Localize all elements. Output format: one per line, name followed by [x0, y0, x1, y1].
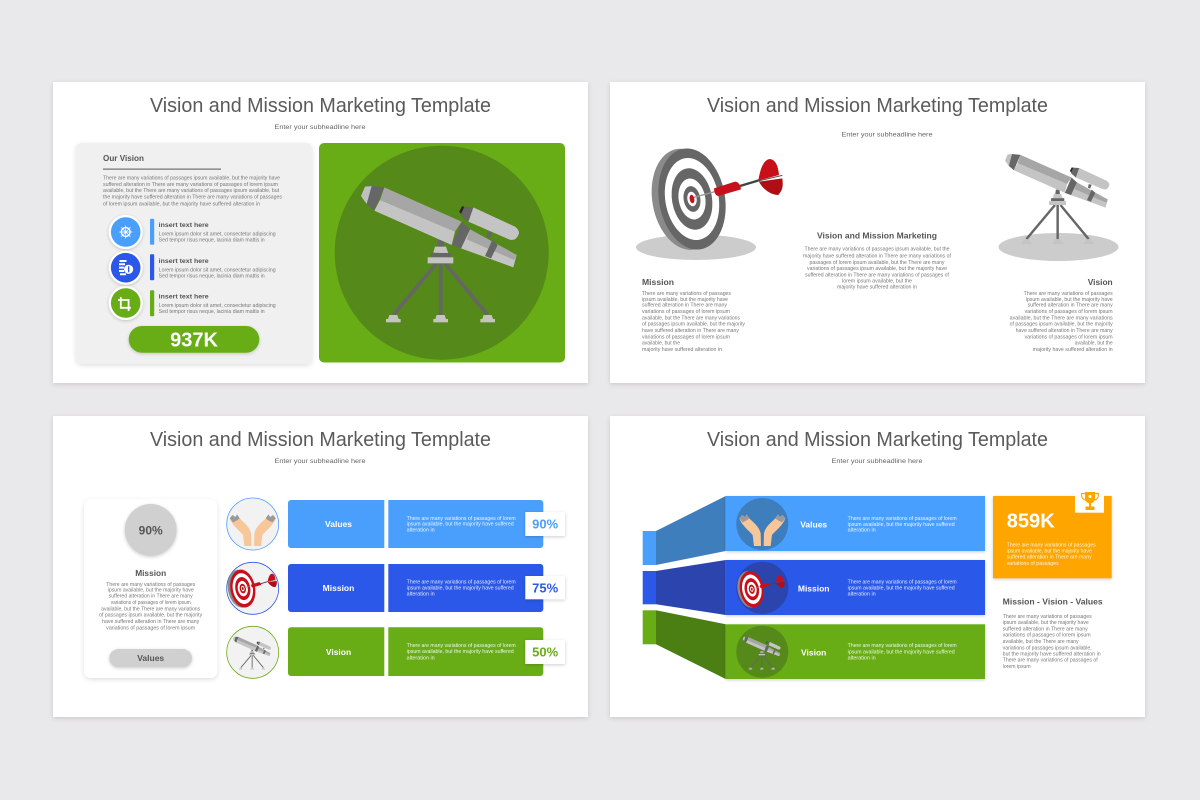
title: Vision and Mission Marketing Template [150, 429, 491, 451]
vision paragraph: There are many variations of passages ipsum available, but the majority have [103, 176, 280, 182]
title: Vision and Mission Marketing Template [150, 95, 491, 117]
center text block: majority have suffered alteration in There are many variations of [803, 254, 952, 260]
ribbon: vision: Vision [801, 648, 826, 658]
center text block: suffered alteration in There are many variations of passages of [805, 273, 950, 279]
mission vision values text [1003, 596, 1103, 670]
ribbon: mission: alteration in [848, 592, 876, 598]
ribbon: vision [643, 610, 985, 679]
row: mission: There are many variations of passages of lorem [407, 579, 516, 585]
mission text: have suffered alteration in There are many [102, 619, 200, 625]
list item 3 [150, 290, 276, 316]
stat card: 859K: variations of passages [1007, 561, 1059, 567]
row: vision: 50% [532, 645, 559, 660]
center text block: variations of passages ipsum available, but the majority have [807, 266, 947, 272]
icon: coins [109, 251, 143, 285]
row: mission: alteration in [407, 592, 435, 598]
mission text block: variations of passages of lorem ipsum [642, 309, 730, 315]
row: mission: Mission [323, 583, 354, 593]
list item 2 [150, 254, 276, 280]
icon: dartboard on shadow [636, 143, 783, 260]
icon: trophy [1075, 490, 1104, 513]
icon: crop [109, 286, 143, 320]
subtitle: Enter your subheadline here [842, 132, 933, 138]
vision paragraph [103, 176, 283, 207]
mission text block: suffered alteration in There are many [642, 303, 728, 309]
center text block: lorem ipsum available, but the [842, 278, 912, 284]
ribbon: values [643, 496, 985, 565]
vision text block: suffered alteration in There are many [1028, 303, 1113, 309]
vision text block: variations of passages of lorem ipsum [1025, 309, 1113, 315]
vision paragraph: available, but the There are many variations of passages ipsum available, but [103, 188, 280, 194]
ribbon: values: ipsum available, but the majority have suffered [848, 522, 955, 528]
mission text: available, but the There are many variations [101, 606, 201, 612]
vision text block: available, but the There are many variations [1010, 315, 1113, 321]
ribbon: mission: ipsum available, but the majority have suffered [848, 585, 955, 591]
panel: slide 3 percentages [53, 416, 588, 717]
mission card [84, 499, 217, 678]
vision text block: variations of passages of lorem ipsum [1025, 334, 1113, 340]
mission text: variations of passages of lorem ipsum [106, 625, 195, 631]
heading: our vision: Our Vision [103, 153, 144, 163]
vision text block: ipsum available, but the majority have [1026, 297, 1113, 303]
row: vision: There are many variations of passages of lorem [407, 643, 516, 649]
mission text [99, 568, 203, 631]
mission vision values text: suffered alteration in There are many [1003, 626, 1088, 632]
panel: slide 4 funnel ribbons [610, 416, 1145, 717]
center text block: Vision and Mission Marketing [817, 230, 937, 240]
vision text block: Vision [1088, 277, 1113, 287]
row: values: alteration in [407, 528, 435, 534]
vision text block [1010, 277, 1113, 353]
vision paragraph: the majority have suffered alteration in There are many variations of passages [103, 194, 283, 200]
percent circle: 90% [139, 524, 163, 538]
list item 2: Lorem ipsum dolor sit amet, consectetur adipiscing [159, 267, 276, 273]
values pill [109, 649, 192, 667]
row: values: 90% [532, 517, 559, 532]
mission text block: have suffered alteration in There are many [642, 328, 740, 334]
vision paragraph: suffered alteration in There are many variations of passages of lorem ipsum [103, 182, 278, 188]
list item 1: Sed tempor risus neque, lacinia diam mattis in [159, 238, 265, 244]
ribbon: values: alteration in [848, 528, 876, 534]
icon: ship wheel [109, 215, 143, 249]
stat pill: 937K [129, 326, 259, 353]
mission text block: There are many variations of passages [642, 291, 732, 297]
ribbon: values: There are many variations of passages of lorem [848, 516, 957, 522]
vision text block: There are many variations of passages [1024, 291, 1113, 297]
list item 1 [150, 219, 276, 245]
mission text block: variations of passages of lorem ipsum [642, 334, 730, 340]
percent circle [125, 504, 177, 556]
row: values: ipsum available, but the majority have suffered [407, 522, 514, 528]
vision text block: have suffered alteration in There are many [1016, 328, 1113, 334]
panel: slide 1 vision overview [53, 82, 588, 383]
icon: telescope circle [227, 626, 279, 678]
row: vision [288, 627, 565, 676]
row: values [288, 500, 565, 548]
ribbon: mission [643, 560, 985, 615]
mission vision values text: but the majority have suffered alteration in [1003, 652, 1101, 658]
ribbon: values: Values [800, 520, 827, 530]
row: mission: 75% [532, 580, 559, 596]
mission vision values text: variations of passages of lorem ipsum [1003, 633, 1091, 639]
mission vision values text: ipsum available, but the majority have [1003, 620, 1089, 626]
center text block: There are many variations of passages ipsum available, but the [804, 247, 950, 253]
mission vision values text: There are many variations of passages of [1003, 658, 1098, 664]
stat card: 859K: ipsum available, but the majority have [1007, 549, 1092, 555]
mission text block: of passages ipsum available, but the majority [642, 322, 746, 328]
ribbon: mission: There are many variations of passages of lorem [848, 579, 957, 585]
icon: telescope on shadow [998, 154, 1118, 261]
mission text: There are many variations of passages [106, 582, 196, 588]
stat card: 859K [993, 490, 1112, 578]
mission text: of passages ipsum available, but the majority [99, 613, 203, 619]
row: values: There are many variations of passages of lorem [407, 516, 516, 522]
row: vision: alteration in [407, 655, 435, 661]
title: Vision and Mission Marketing Template [707, 429, 1048, 451]
vision text block: majority have suffered alteration in [1033, 347, 1113, 353]
ribbon: mission: Mission [798, 584, 830, 594]
list item 2: insert text here [159, 258, 209, 265]
icon: hands circle [227, 498, 279, 550]
ribbon: vision: There are many variations of passages of lorem [848, 643, 957, 649]
mission vision values text: There are many variations of passages [1003, 614, 1092, 620]
stat card: 859K: There are many variations of passages [1007, 542, 1096, 548]
stat card: 859K: 859K [1007, 511, 1055, 533]
mission text block: majority have suffered alteration in [642, 347, 722, 353]
mission text block [642, 277, 746, 353]
row: mission: ipsum available, but the majority have suffered [407, 586, 514, 592]
mission vision values text: available, but the There are many [1003, 639, 1079, 645]
mission text: suffered alteration in There are many [109, 594, 193, 600]
mission vision values text: variations of passages ipsum available, [1003, 645, 1092, 651]
list item 2: Sed tempor risus neque, lacinia diam mattis in [159, 273, 265, 279]
row: vision: Vision [326, 647, 351, 657]
center text block [803, 230, 952, 291]
vision text block: of passages ipsum available, but the majority [1010, 322, 1113, 328]
mission text block: available, but the There are many variations [642, 315, 741, 321]
list item 3: insert text here [159, 294, 209, 300]
list item 1: Lorem ipsum dolor sit amet, consectetur adipiscing [159, 232, 276, 238]
telescope panel [319, 143, 565, 362]
panel: slide 2 mission and vision [610, 82, 1145, 383]
stat pill: 937K: 937K [170, 329, 218, 351]
mission text block: Mission [642, 277, 674, 287]
mission vision values text: lorem ipsum [1003, 664, 1031, 670]
mission text block: available, but the [642, 340, 680, 346]
center text block: passages of lorem ipsum available, but the There are many [810, 260, 945, 266]
icon: target circle [225, 562, 279, 614]
list item 1: insert text here [159, 222, 209, 229]
stat card: 859K: suffered alteration in There are many [1007, 555, 1092, 561]
title: Vision and Mission Marketing Template [707, 95, 1048, 117]
mission vision values text: Mission - Vision - Values [1003, 596, 1103, 606]
mission text: variations of passages of lorem ipsum [111, 600, 191, 606]
card: our vision [76, 143, 312, 364]
center text block: majority have suffered alteration in [837, 285, 917, 291]
row: mission [288, 564, 565, 612]
ribbon: vision: alteration in [848, 656, 876, 662]
mission text: Mission [135, 568, 166, 578]
row: values: Values [325, 519, 352, 529]
mission text: ipsum available, but the majority have [108, 588, 194, 594]
list item 3: Sed tempor risus neque, lacinia diam mattis in [159, 309, 265, 315]
row: vision: ipsum available, but the majority have suffered [407, 649, 514, 655]
ribbon: vision: ipsum available, but the majority have suffered [848, 649, 955, 655]
subtitle: Enter your subheadline here [274, 124, 366, 131]
subtitle: Enter your subheadline here [832, 458, 923, 465]
subtitle: Enter your subheadline here [274, 458, 366, 465]
vision text block: available, but the [1075, 340, 1113, 346]
values pill: Values [137, 653, 164, 663]
vision paragraph: of lorem ipsum available, but the majority have suffered alteration in [103, 201, 260, 207]
mission text block: ipsum available, but the majority have [642, 297, 728, 303]
list item 3: Lorem ipsum dolor sit amet, consectetur adipiscing [159, 303, 276, 309]
